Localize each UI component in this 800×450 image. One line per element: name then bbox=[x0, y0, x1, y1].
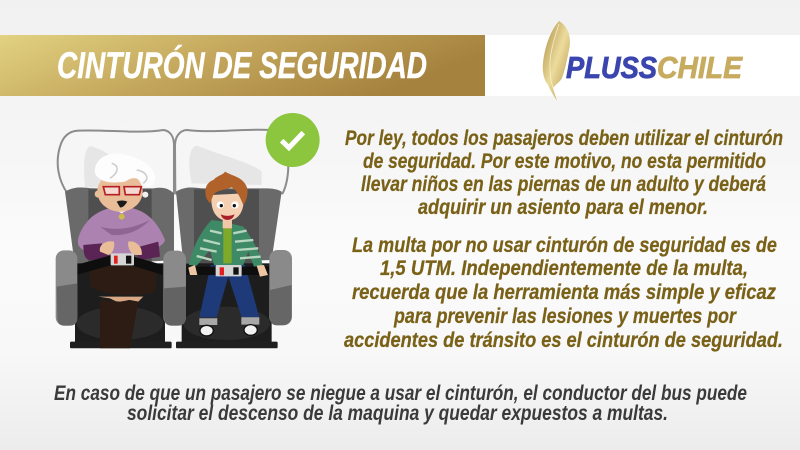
seat belt: left bbox=[76, 253, 163, 275]
grandmother bbox=[78, 154, 165, 348]
text block: fine: 1,5 UTM. Independientemente de la multa, bbox=[380, 257, 748, 280]
text block: passenger rule: adquirir un asiento para el menor. bbox=[418, 196, 708, 219]
title: CINTURÓN DE SEGURIDAD bbox=[57, 45, 427, 86]
text block: driver note bbox=[54, 382, 747, 425]
illustration: seated passengers bbox=[56, 113, 320, 348]
text block: passenger rule bbox=[345, 127, 783, 219]
logo panel bbox=[485, 21, 800, 101]
text block: fine bbox=[344, 234, 783, 352]
icon: gold feather bbox=[543, 21, 570, 101]
logo wordmark CHILE: CHILE bbox=[657, 50, 743, 85]
right seat bbox=[175, 130, 288, 348]
logo wordmark PLUSS: PLUSS bbox=[566, 50, 657, 85]
header banner bbox=[0, 35, 485, 96]
icon: green check badge bbox=[266, 113, 320, 167]
text block: driver note: solicitar el descenso de la maquina y quedar expuestos a multas. bbox=[127, 402, 668, 425]
boy bbox=[187, 172, 272, 336]
left seat bbox=[58, 130, 174, 348]
armrests bbox=[56, 250, 292, 326]
text block: fine: para prevenir las lesiones y muertes por bbox=[393, 305, 738, 328]
